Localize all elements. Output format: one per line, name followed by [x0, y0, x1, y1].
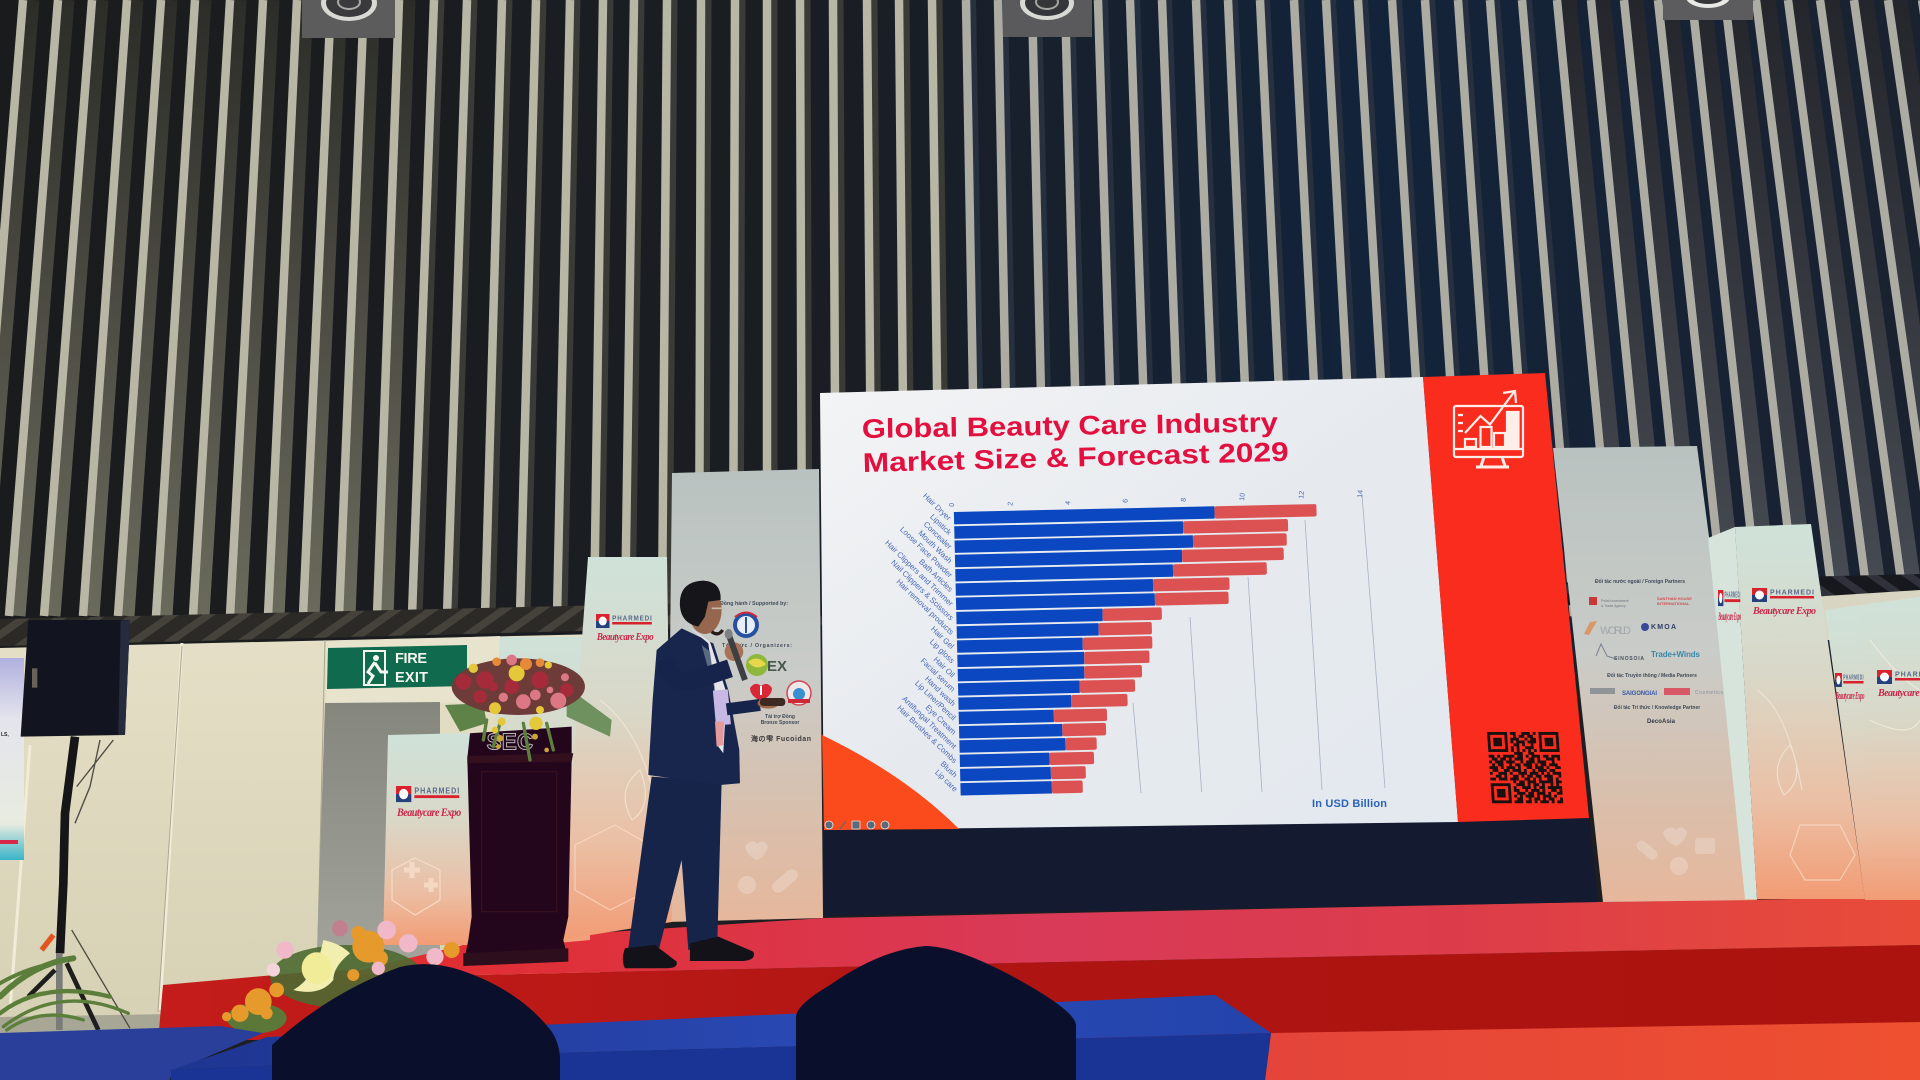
chart category labels: Mouth Wash [916, 529, 954, 565]
panel: doorway opening [316, 702, 440, 985]
logo: foreign partner names: Polish Investment [1601, 599, 1629, 603]
panel: mint pillar left [560, 557, 672, 940]
blooms [455, 671, 573, 703]
logo: media partner names: Cosmetics [1695, 690, 1724, 696]
chart category labels: Concealer [922, 520, 954, 551]
logo: pharmedi beautycare expo: Beautycare Expo [1752, 606, 1816, 617]
bar chart [954, 504, 1323, 796]
chart category labels: Nail Clippers & Scissors [889, 558, 955, 622]
sponsor text: fucoidan: 海の雫 Fucoidan [751, 734, 811, 743]
logo: pharmedi on fold: PHARMEDI [1724, 592, 1740, 600]
chart category labels: Hair removal products [894, 577, 956, 637]
logo: pharmedi beautycare expo: PHARMEDI [1770, 590, 1814, 596]
panel: cream exhibition wall [0, 590, 1920, 1035]
logo: foreign partner names: SANTHAN HOUSE [1657, 596, 1692, 601]
trousers [628, 777, 722, 952]
sponsor text: organizers: Tổ chức / Organizers: [722, 642, 792, 649]
icon: green organiser logo [746, 654, 787, 676]
sign text: FIRE [395, 651, 427, 667]
icon: green organiser logo: EX [767, 658, 787, 675]
chart axis labels: 4 [1065, 501, 1072, 505]
panel: far-left poster fragment: LS, [1, 732, 9, 738]
panel: grey sponsor board left [667, 469, 823, 922]
logo: pharmedi on far fold [1835, 673, 1865, 702]
icon: round sponsor seal [787, 681, 811, 705]
jacket [648, 628, 740, 785]
logo: foreign partner names [1584, 596, 1701, 662]
icon: ceiling vent right [1663, 0, 1753, 20]
chart category labels: Lip gloss [928, 637, 956, 665]
badge and lanyard [713, 689, 731, 726]
panel: fire exit sign [327, 645, 467, 689]
icon: red heart logo [750, 684, 772, 701]
panel: stage carpet [159, 897, 1920, 1080]
panel: LED screen base [824, 816, 1598, 916]
flower arrangement on lectern [445, 655, 612, 760]
panel: fire exit sign: EXIT [395, 670, 428, 686]
sponsor text: foreign partners: Đối tác nước ngoài / Foreign Partners [1595, 578, 1685, 585]
green leaves [270, 945, 423, 1008]
logo: pharmedi on far pillar [1877, 670, 1920, 699]
chart category labels: Facial serum [919, 656, 957, 694]
sponsor text: media partners: Đối tác Truyền thông / Media Partners [1607, 672, 1697, 679]
logo: foreign partner names: KMOA [1651, 624, 1676, 631]
chart category labels: Hair Clippers and Trimmer [883, 538, 955, 608]
logo: media partner names: SAIGONGIAI [1622, 691, 1657, 697]
presenter [623, 581, 785, 968]
chart category labels: Hair Dryer [921, 491, 953, 523]
chart category labels: Hair Oil [932, 655, 957, 680]
title: Global Beauty Care Industry [862, 407, 1278, 444]
decoration: faint medical icons [738, 841, 800, 895]
chart category labels: Lip care [933, 768, 959, 794]
speaker on tripod [21, 620, 130, 1030]
panel: red slide sidebar [1423, 373, 1589, 822]
chart category labels: Loose Face Powder [898, 525, 955, 580]
bars: 2024 value in blue [954, 506, 1221, 796]
chart axis labels: 6 [1122, 499, 1130, 503]
chart axis labels: 10 [1239, 493, 1247, 501]
sponsor text: supported by: Đồng hành / Supported by: [720, 601, 788, 607]
speaker cabinet [21, 620, 130, 737]
panel: presentation slide [820, 377, 1458, 830]
chart category labels: Hair Gel [929, 624, 956, 651]
logo: foreign partner names: Trade+Winds [1651, 650, 1701, 659]
pink blooms [267, 920, 444, 977]
icon: running figure [364, 651, 388, 685]
logo: pharmedi beautycare expo [396, 786, 462, 819]
shoes [623, 937, 754, 968]
logo: foreign partner names: INTERNATIONAL [1657, 601, 1690, 606]
chart category labels: Antifungal Treatment [900, 694, 959, 751]
chart category labels: Bath Articles [917, 557, 955, 594]
chart axis labels: 14 [1357, 490, 1365, 498]
panel: small mint board [383, 733, 472, 945]
speaker stand and cables [28, 737, 130, 1030]
chart axis labels: 8 [1181, 498, 1188, 502]
gesturing arm [727, 705, 760, 709]
chart category labels: Lip Liner/Pencil [913, 679, 958, 722]
orange blooms [222, 926, 460, 1022]
chart axis labels: 2 [1007, 502, 1015, 506]
chart unit label: In USD Billion [1312, 798, 1387, 810]
slideshow navigation icons [825, 821, 889, 829]
panel: slatted wall background [0, 0, 1920, 660]
blue table left [0, 1026, 263, 1080]
logo: pharmedi beautycare expo: Beautycare Expo [596, 633, 654, 643]
lectern [463, 727, 573, 966]
green foliage [567, 687, 612, 737]
panel: grey sponsor board right [1553, 446, 1757, 902]
title: Market Size & Forecast 2029 [862, 437, 1289, 478]
logo: foreign partner names: WORLD [1600, 625, 1631, 637]
logo: pharmedi beautycare expo: PHARMEDI [612, 615, 652, 623]
icon: monitor with rising chart [1454, 391, 1523, 467]
lectern logo text: SEC [487, 728, 533, 754]
logo: pharmedi on far fold: Beautycare Expo [1835, 690, 1865, 702]
sponsor text: knowledge partner: Đối tác Tri thức / Knowledge Partner [1614, 704, 1700, 711]
raised arm [665, 660, 730, 682]
icon: ceiling vent centre [1003, 0, 1092, 37]
logo: media partner names [1590, 688, 1724, 697]
logo: pharmedi on fold: Beautycare Expo [1718, 609, 1741, 623]
panel: far-left poster fragment [0, 658, 24, 860]
chart category labels: Lipstick [928, 512, 953, 537]
logo: pharmedi beautycare expo: PHARMEDI [414, 786, 459, 796]
logo: knowledge partner: DecoAsia [1647, 719, 1676, 725]
plant fronds [0, 958, 128, 1030]
icon: ceiling vent left [302, 0, 395, 38]
logo: pharmedi on far fold: PHARMEDI [1843, 674, 1864, 682]
panel: mint pillar far right [1825, 597, 1920, 900]
chart axis labels: 0 [949, 503, 956, 507]
chart category labels: Hair Brushes & Combs [895, 703, 959, 765]
chair right [796, 946, 1076, 1080]
head [688, 586, 722, 634]
shirt and tie [688, 627, 727, 753]
chart gridlines [1133, 495, 1385, 793]
panel: mint pillar right [1708, 524, 1865, 899]
bars: forecast growth in red [1043, 504, 1323, 794]
logo: pharmedi on fold [1718, 590, 1741, 623]
logo: pharmedi beautycare expo [1752, 588, 1816, 617]
title [862, 407, 1289, 478]
microphone hand [725, 642, 743, 661]
chart category labels: Blush [939, 759, 959, 779]
sponsor text: bronze sponsor: Tài trợ Đồng [765, 714, 795, 720]
panel: mint backdrop behind flowers [483, 637, 590, 950]
floor flower arrangement [222, 920, 460, 1033]
chart category labels: Hand wash [923, 674, 957, 708]
chart category labels: Eye Cream [924, 703, 958, 737]
logo: pharmedi beautycare expo: Beautycare Expo [396, 806, 462, 819]
chart axis labels [949, 490, 1365, 507]
decoration: faint medical icons [1635, 827, 1715, 875]
lily [293, 940, 350, 992]
chair left [272, 964, 560, 1080]
blue table centre [171, 995, 1271, 1080]
chart axis labels: 12 [1298, 491, 1306, 499]
logo: pharmedi beautycare expo [596, 614, 654, 643]
decoration: orange corner curve [822, 735, 959, 830]
panel: grey sponsor board left: Bronze Sponsor [761, 720, 799, 726]
logo: foreign partner names: & Trade Agency [1601, 604, 1626, 608]
chart category labels [883, 491, 959, 794]
logo: foreign partner names: SINOSOIA [1614, 656, 1644, 662]
icon: QR code [1487, 733, 1563, 802]
icon: blue health seal [733, 612, 759, 638]
